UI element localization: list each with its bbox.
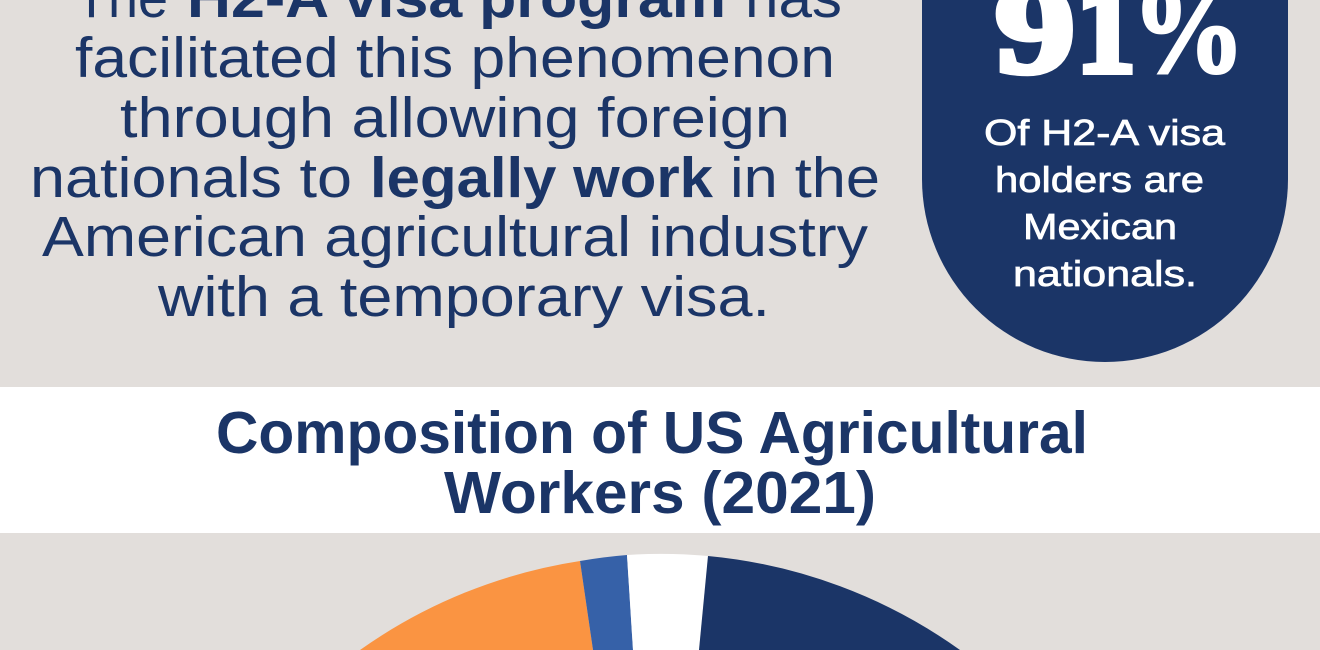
- text block: H2-A visa program description: legally work: [370, 146, 713, 210]
- callout text: [984, 112, 1226, 294]
- callout text: holders are: [995, 159, 1204, 200]
- panel: chart title band: [0, 387, 1320, 533]
- callout text: Mexican: [1023, 206, 1177, 247]
- text block: H2-A visa program description: facilitated this phenomenon: [75, 26, 835, 90]
- heading: chart title: Workers (2021): [444, 460, 876, 526]
- callout: 91 percent badge: [922, 0, 1288, 362]
- heading: chart title: Composition of US Agricultural: [216, 400, 1088, 466]
- heading: chart title: [216, 400, 1088, 526]
- text block: H2-A visa program description: through allowing foreign: [120, 86, 790, 150]
- text block: H2-A visa program description: [30, 0, 880, 329]
- statistic: 91%: [995, 0, 1245, 100]
- text block: H2-A visa program description: in the: [730, 146, 880, 210]
- text block: H2-A visa program description: American agricultural industry: [42, 205, 869, 269]
- pie chart: composition of US agricultural workers: [360, 554, 960, 650]
- callout text: nationals.: [1013, 253, 1197, 294]
- text block: H2-A visa program description: nationals to: [30, 146, 352, 210]
- text block: H2-A visa program description: with a temporary visa.: [157, 265, 770, 329]
- callout text: Of H2-A visa: [984, 112, 1226, 153]
